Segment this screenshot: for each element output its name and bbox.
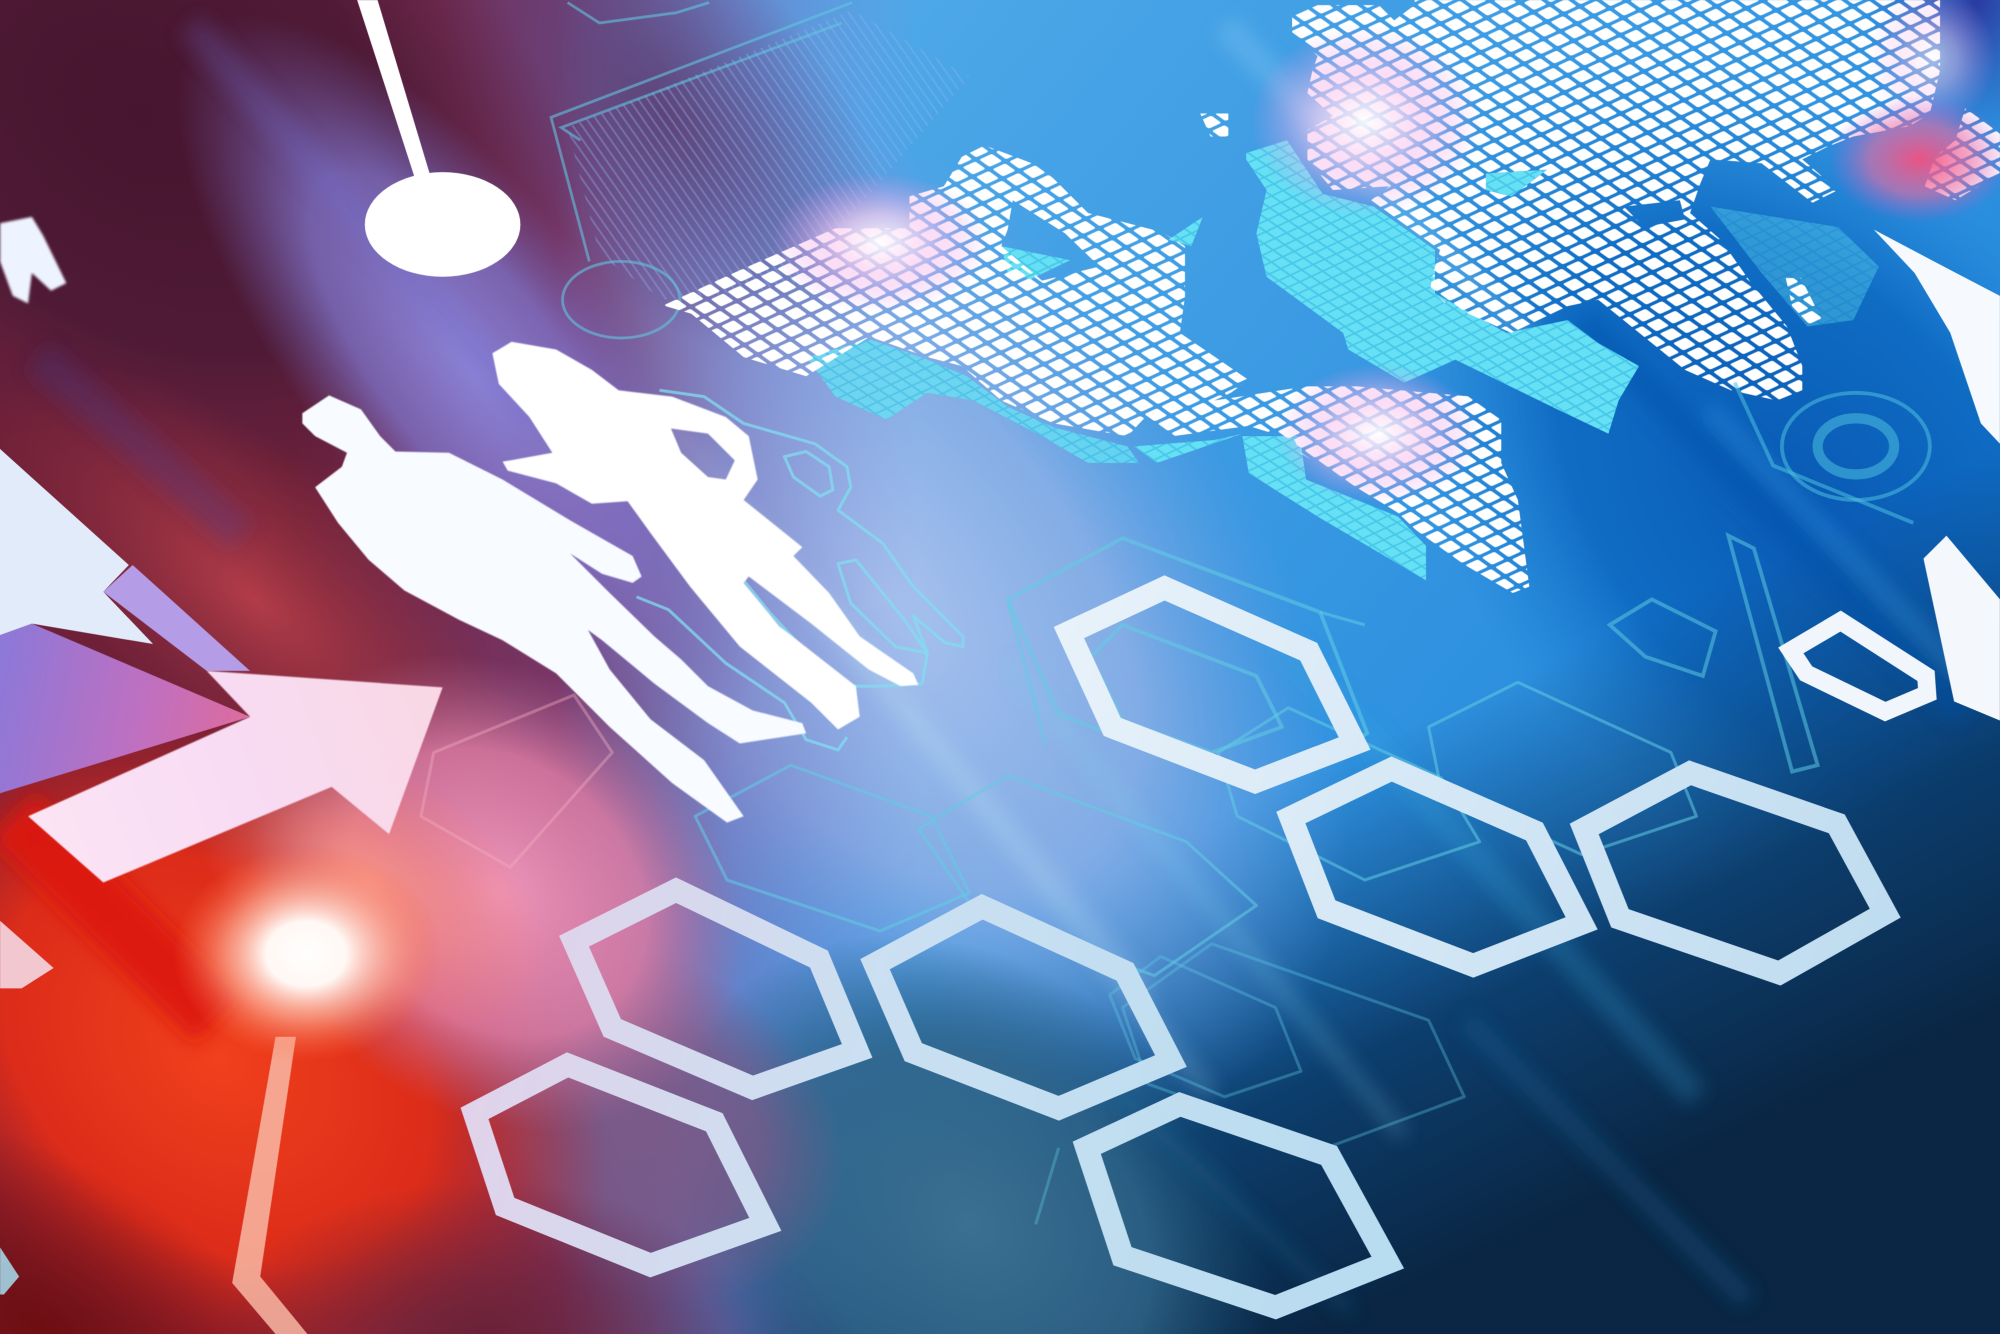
hexagon group: upper right (1069, 588, 1885, 973)
icon: hand fragment (0, 217, 66, 304)
world map: teal dot regions (806, 140, 1879, 580)
background circuit lines (551, 3, 969, 338)
silhouette: man (302, 395, 806, 823)
percent sign: ghost outline (1610, 536, 1818, 772)
speech bubble at left (0, 449, 250, 1294)
white shape: top right (1874, 230, 2000, 444)
arrow (28, 671, 443, 883)
hexagon group: lower centre (474, 890, 1388, 1307)
icon: map pin (357, 0, 520, 277)
ghost hexagon network (421, 538, 1696, 1224)
percent sign (1791, 536, 2000, 721)
lens flare with connector line (172, 846, 440, 1334)
world map: white dot continents (661, 0, 2000, 593)
ghost outline figures (636, 390, 963, 750)
map glow highlights (772, 0, 2000, 504)
silhouette: woman (492, 342, 918, 729)
circular gauge outline (1735, 383, 1930, 523)
